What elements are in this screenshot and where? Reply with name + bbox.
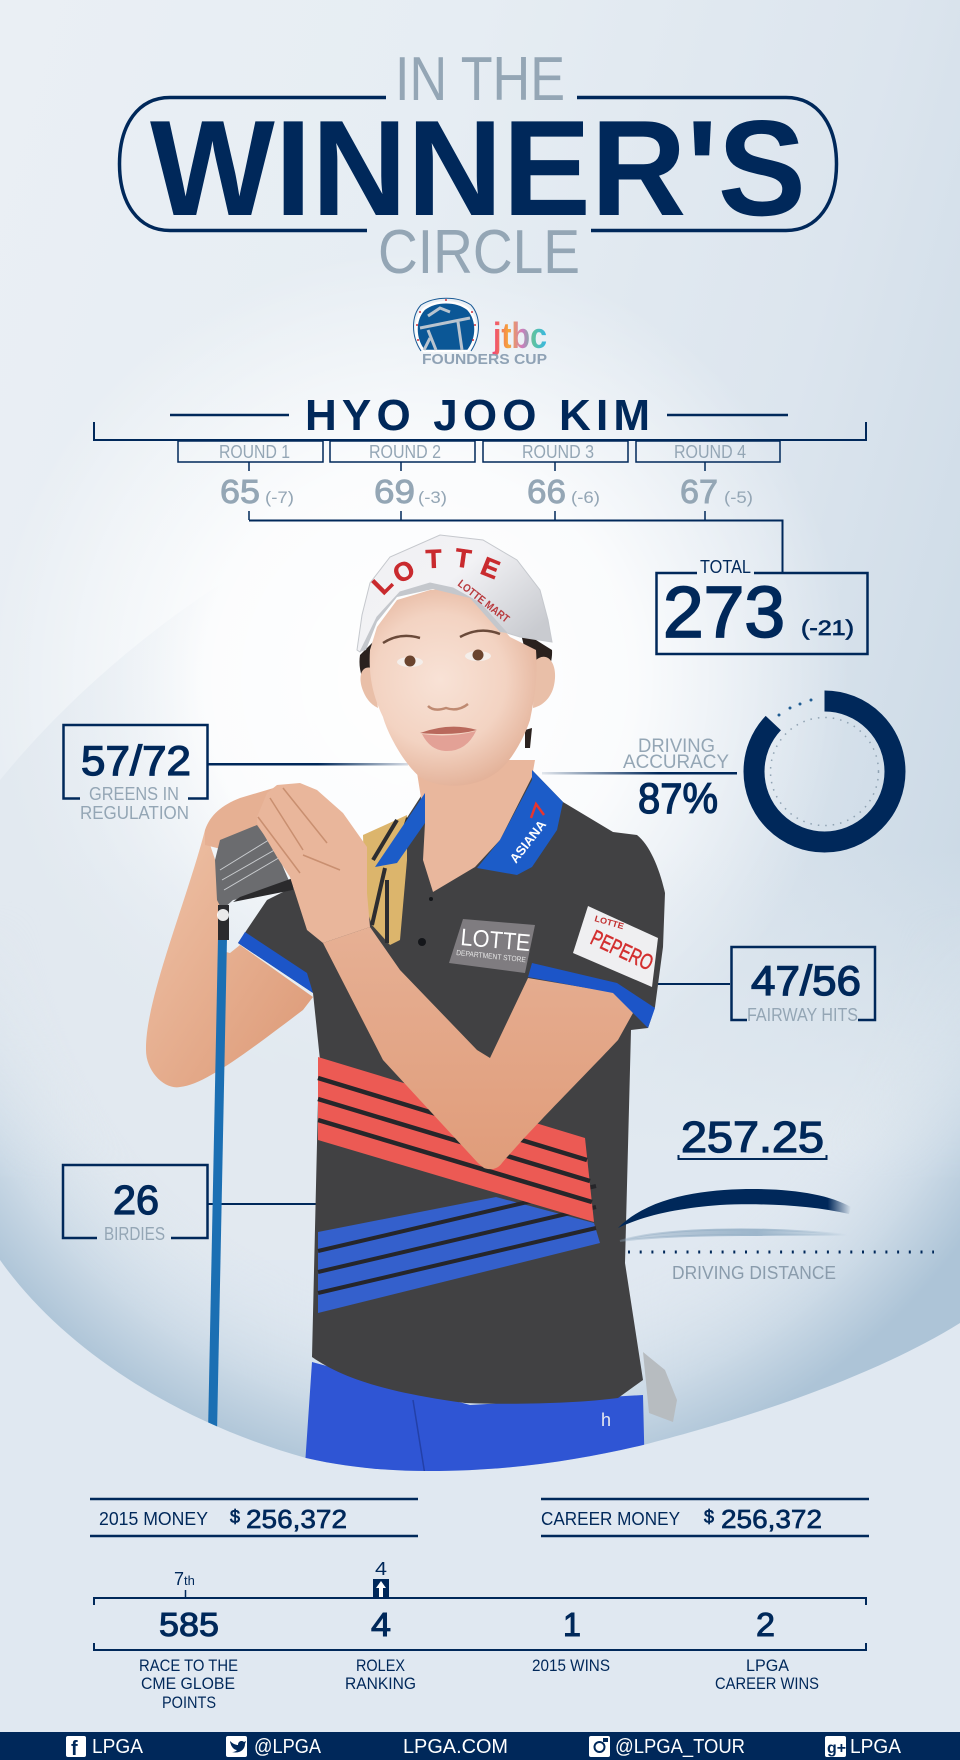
stat: fairway hits: FAIRWAY HITS xyxy=(747,1005,858,1025)
hair xyxy=(359,630,552,748)
label: DRIVING DISTANCE xyxy=(672,1263,836,1283)
Rolex ranking: RANKING xyxy=(345,1674,416,1693)
round 1: 65 xyxy=(220,473,260,510)
golf club xyxy=(208,825,293,1433)
race to the CME Globe xyxy=(139,1569,238,1712)
logo: jtbc: jtbc xyxy=(492,315,547,356)
shirt stripes: blue xyxy=(318,1186,600,1313)
patch: Lotte xyxy=(449,919,535,973)
cap logo: LOTTE xyxy=(366,542,504,600)
title xyxy=(120,45,836,287)
race to the CME Globe: 585 xyxy=(159,1606,219,1643)
total score box: 273 xyxy=(663,573,785,653)
shirt stripes: red xyxy=(318,1057,594,1222)
total score box: TOTAL xyxy=(700,557,751,577)
money: 2015: 2015 MONEY xyxy=(99,1509,208,1529)
round 2 xyxy=(330,441,475,520)
round 4: ROUND 4 xyxy=(674,442,746,462)
stat: birdies xyxy=(63,1165,208,1244)
Rolex ranking xyxy=(345,1559,416,1693)
round 3: ROUND 3 xyxy=(522,442,594,462)
glove xyxy=(643,1352,677,1422)
race to the CME Globe: CME GLOBE xyxy=(141,1674,235,1693)
money: career: CAREER MONEY xyxy=(541,1509,680,1529)
money: 2015: $ xyxy=(230,1507,240,1527)
patch: Pepero xyxy=(573,906,658,987)
LPGA career wins xyxy=(715,1606,819,1693)
club shaft xyxy=(208,905,229,1433)
money: 2015 xyxy=(90,1499,418,1536)
cap side text: LOTTE MART xyxy=(455,578,512,626)
icon: instagram xyxy=(589,1736,610,1757)
value underline xyxy=(678,1155,826,1159)
eyes xyxy=(397,650,491,667)
left ear xyxy=(360,667,378,708)
face xyxy=(370,588,537,786)
front hand xyxy=(257,783,370,943)
money: career xyxy=(541,1499,869,1536)
player name: HYO JOO KIM xyxy=(305,391,650,440)
round 1: ROUND 1 xyxy=(219,442,290,462)
eyebrows xyxy=(383,631,500,643)
title line: in the: IN THE xyxy=(395,45,565,114)
stat: birdies: BIRDIES xyxy=(104,1224,165,1244)
title frame xyxy=(120,98,836,230)
stat: fairway hits xyxy=(732,947,875,1025)
round 1: (-7) xyxy=(265,488,294,507)
round 1 xyxy=(178,441,323,520)
LPGA career wins: 2 xyxy=(756,1606,775,1643)
total score box xyxy=(656,557,868,654)
2015 wins xyxy=(532,1606,610,1675)
connector lines behind player xyxy=(208,763,737,1205)
icon: twitter xyxy=(226,1736,247,1757)
background disc xyxy=(0,690,960,1471)
website: LPGA.COM xyxy=(403,1736,508,1758)
LPGA career wins: CAREER WINS xyxy=(715,1674,819,1693)
stat: greens in regulation: GREENS IN xyxy=(89,784,179,804)
player photo illustration xyxy=(146,535,677,1480)
icon: LPGA emblem xyxy=(414,298,478,351)
round 4: 67 xyxy=(680,473,718,510)
pants: h xyxy=(601,1410,611,1430)
nose xyxy=(428,704,468,710)
right arm xyxy=(323,927,633,1169)
icon: google plus: g+ xyxy=(827,1740,846,1757)
stat: driving accuracy: 87% xyxy=(638,775,718,823)
footer xyxy=(0,1732,960,1760)
instagram handle: @LPGA_TOUR xyxy=(615,1736,745,1758)
race to the CME Globe: 7th xyxy=(174,1569,195,1589)
round 4: (-5) xyxy=(724,488,753,507)
stat: driving distance xyxy=(618,1113,934,1283)
Rolex ranking: ROLEX xyxy=(356,1656,405,1675)
rounds scorecard xyxy=(94,422,866,520)
logo: Founders Cup xyxy=(414,298,547,368)
round 2: (-3) xyxy=(418,488,447,507)
dotted ground line xyxy=(628,1250,934,1254)
round 2: 69 xyxy=(374,473,415,510)
LPGA career wins: LPGA xyxy=(746,1656,790,1675)
stat: greens in regulation: REGULATION xyxy=(80,803,189,823)
stat: fairway hits: 47/56 xyxy=(751,957,861,1004)
left arm xyxy=(146,830,313,1087)
stat: greens in regulation: 57/72 xyxy=(81,737,191,784)
stat: greens in regulation xyxy=(64,725,208,823)
back hand xyxy=(205,788,273,848)
collar: ASIANA xyxy=(507,817,550,866)
google plus handle: LPGA xyxy=(850,1736,902,1758)
donut chart: 87% xyxy=(754,698,895,842)
stat: driving accuracy: ACCURACY xyxy=(623,752,729,773)
title line: winner's: WINNER'S xyxy=(150,92,806,244)
round 4 xyxy=(636,441,780,520)
facebook handle: LPGA xyxy=(92,1736,144,1758)
patch: Pepero: PEPERO xyxy=(587,925,657,975)
round 3: 66 xyxy=(527,473,566,510)
stats table xyxy=(94,1559,866,1712)
collar xyxy=(375,770,563,875)
twitter handle: @LPGA xyxy=(254,1736,322,1758)
patch: Lotte: LOTTE xyxy=(459,924,532,957)
patch: Pepero: LOTTE xyxy=(593,913,625,931)
stat: driving accuracy: DRIVING xyxy=(638,736,715,757)
patch: Lotte: DEPARTMENT STORE xyxy=(456,948,526,964)
2015 wins: 1 xyxy=(563,1606,581,1643)
cap xyxy=(357,535,552,652)
shoulder stripes xyxy=(363,815,408,945)
title line: circle: CIRCLE xyxy=(378,218,580,287)
total score box: (-21) xyxy=(801,617,854,640)
pants xyxy=(304,1362,645,1480)
mouth xyxy=(420,727,477,751)
Rolex ranking: 4 xyxy=(375,1559,387,1579)
round 2: ROUND 2 xyxy=(369,442,441,462)
round 3: (-6) xyxy=(571,488,600,507)
logo caption: FOUNDERS CUP xyxy=(422,352,547,368)
race to the CME Globe: RACE TO THE xyxy=(139,1656,238,1675)
race to the CME Globe: POINTS xyxy=(162,1693,216,1712)
ear xyxy=(533,657,555,708)
icon: facebook xyxy=(66,1736,86,1760)
stat: birdies: 26 xyxy=(113,1177,159,1223)
cap brim shadow xyxy=(360,583,507,652)
stat: driving accuracy xyxy=(623,736,729,823)
sleeve trim right xyxy=(528,963,655,1028)
connector to total xyxy=(249,520,782,572)
shirt sleeve trim left xyxy=(238,932,313,993)
money: 2015: 256,372 xyxy=(246,1504,347,1534)
value: 257.25 xyxy=(681,1113,824,1162)
arc shadow xyxy=(620,1229,848,1241)
neck xyxy=(415,760,535,892)
shot arc xyxy=(618,1189,851,1228)
Rolex ranking: 4 xyxy=(371,1606,391,1643)
icon: facebook: f xyxy=(71,1738,78,1760)
2015 wins: 2015 WINS xyxy=(532,1656,610,1675)
shirt xyxy=(238,770,665,1404)
money: career: $ xyxy=(704,1507,714,1527)
club head xyxy=(215,825,293,910)
money: career: 256,372 xyxy=(721,1504,822,1534)
round 3 xyxy=(483,441,628,520)
shirt buttons xyxy=(418,897,433,946)
